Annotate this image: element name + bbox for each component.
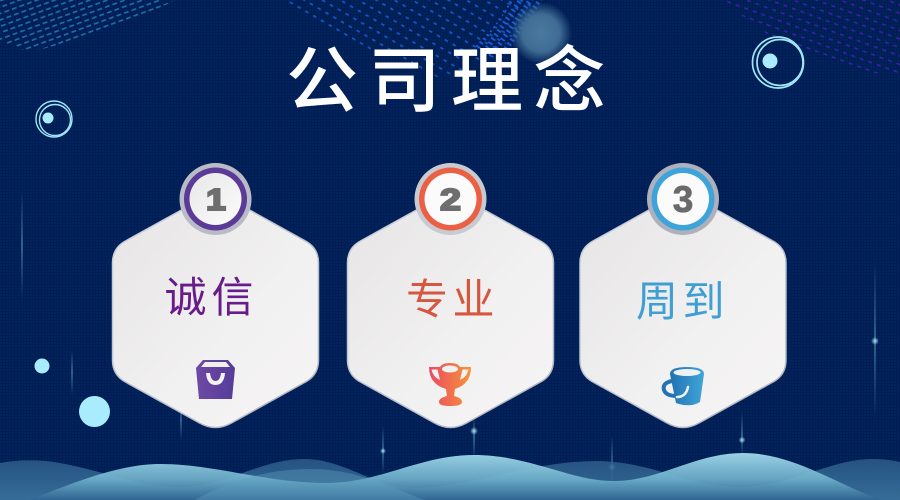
hexagon card (348, 196, 554, 428)
light rays and sparkles (22, 190, 879, 495)
title: 公司理念 (286, 42, 616, 122)
badge 2 (414, 163, 486, 235)
waves (0, 453, 900, 500)
ring: top right (752, 37, 804, 88)
icon: shopping bag (196, 360, 235, 399)
dot: small (34, 358, 50, 374)
label 诚信: 诚信 (164, 274, 259, 321)
label 专业: 专业 (406, 276, 499, 323)
badge 3: 3 (673, 179, 693, 220)
hexagon card (112, 196, 318, 428)
badge 3 (647, 163, 719, 235)
badge 1: 1 (206, 182, 226, 217)
panel: 专业 (348, 163, 554, 428)
panel: 诚信 (112, 163, 318, 428)
hexagon card (580, 196, 786, 428)
ring: top left (36, 101, 72, 137)
glow spot behind title (510, 2, 572, 64)
label 周到: 周到 (636, 278, 729, 325)
panel: 周到 (580, 163, 786, 428)
decorative dotted mesh, top (0, 0, 900, 80)
icon: bucket (664, 367, 704, 405)
badge 2: 2 (440, 182, 461, 217)
icon: trophy (429, 363, 471, 406)
dot: large (79, 396, 110, 427)
badge 1 (180, 163, 252, 235)
